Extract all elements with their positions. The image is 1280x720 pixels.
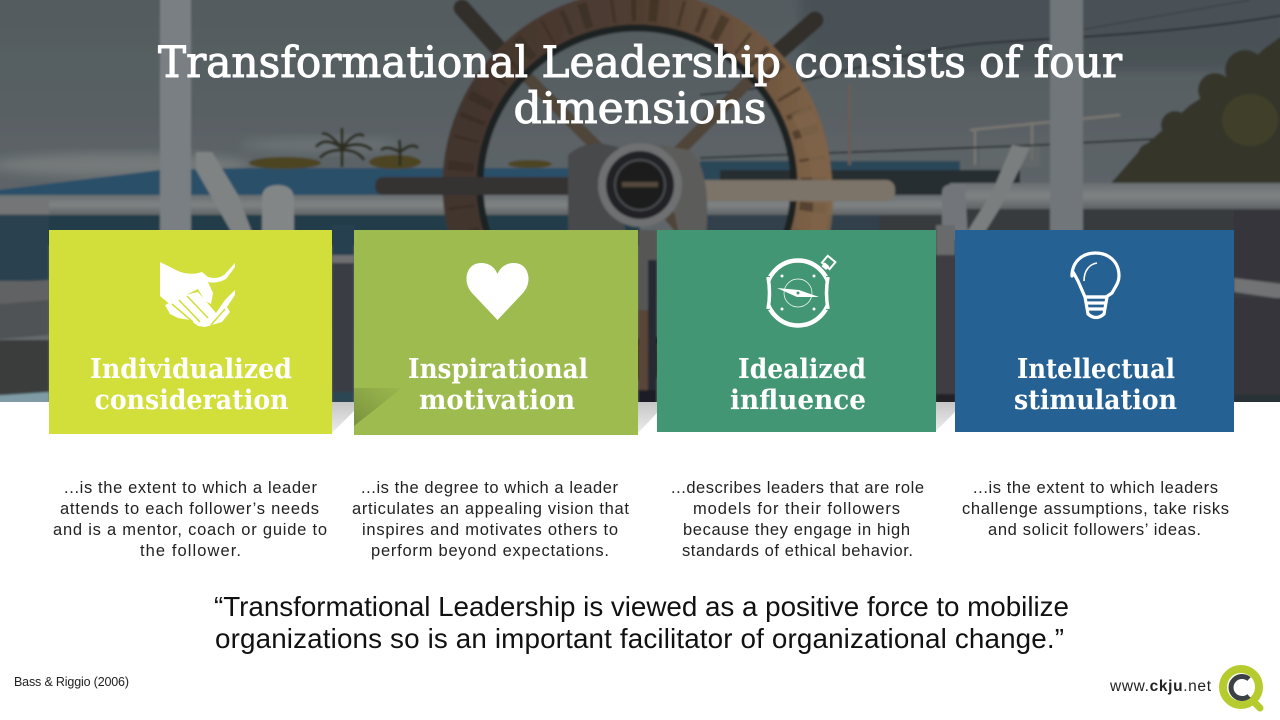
title <box>158 38 1122 134</box>
heading: idealized influence: Idealized <box>738 354 866 385</box>
text block: individualized consideration description <box>53 479 327 560</box>
heading: individualized consideration <box>90 354 292 416</box>
text block: intellectual stimulation description: and solicit followers’ ideas. <box>988 521 1201 539</box>
panel: individualized consideration <box>49 230 332 434</box>
text block: inspirational motivation description: perform beyond expectations. <box>371 542 609 560</box>
deck strips <box>0 202 48 214</box>
heading: idealized influence: influence <box>730 385 866 416</box>
icon: heart <box>466 263 529 320</box>
text block: individualized consideration description: the follower. <box>140 542 241 560</box>
title: Transformational Leadership consists of four <box>158 38 1122 88</box>
text block: inspirational motivation description: inspires and motivates others to <box>362 521 618 539</box>
website url: www.ckju.net <box>1109 678 1212 695</box>
text block: individualized consideration description: attends to each follower’s needs <box>60 500 319 518</box>
text block: individualized consideration description: ...is the extent to which a leader <box>64 479 318 497</box>
citation: Bass & Riggio (2006) <box>14 675 129 689</box>
heading: inspirational motivation <box>408 354 588 416</box>
heading: intellectual stimulation: Intellectual <box>1017 354 1175 385</box>
background photo: ship wheel on deck <box>0 0 1280 415</box>
icon: compass <box>762 256 835 326</box>
panel: inspirational motivation <box>354 230 638 435</box>
panel: idealized influence <box>657 230 936 432</box>
heading: individualized consideration: consideration <box>94 385 289 416</box>
title: dimensions <box>514 84 766 134</box>
text block: idealized influence description <box>671 479 924 560</box>
wheel <box>375 8 895 362</box>
text block: inspirational motivation description: ...is the degree to which a leader <box>361 479 618 497</box>
text block: idealized influence description: ...describes leaders that are role <box>671 479 924 497</box>
palms and trees <box>249 155 552 169</box>
text block: intellectual stimulation description: ...is the extent to which leaders <box>973 479 1218 497</box>
icon: logo <box>1223 669 1260 708</box>
text block: idealized influence description: models for their followers <box>693 500 900 518</box>
wires <box>700 0 1280 158</box>
quote: “Transformational Leadership is viewed as a positive force to mobilize <box>214 591 1069 622</box>
distant building <box>970 115 1120 165</box>
text block: idealized influence description: because they engage in high <box>683 521 910 539</box>
heading: intellectual stimulation: stimulation <box>1014 385 1177 416</box>
heading: intellectual stimulation <box>1014 354 1177 416</box>
heading: inspirational motivation: Inspirational <box>408 354 588 385</box>
poles <box>160 0 191 240</box>
text block: intellectual stimulation description: challenge assumptions, take risks <box>962 500 1229 518</box>
heading: idealized influence <box>730 354 866 416</box>
railing <box>0 195 960 215</box>
text block: inspirational motivation description <box>352 479 629 560</box>
text block: intellectual stimulation description <box>962 479 1229 539</box>
quote: organizations so is an important facilitator of organizational change.” <box>215 623 1064 654</box>
heading: individualized consideration: Individualized <box>90 354 292 385</box>
shadows under cards <box>332 402 955 433</box>
heading: inspirational motivation: motivation <box>419 385 575 416</box>
text block: inspirational motivation description: articulates an appealing vision that <box>352 500 629 518</box>
panel: intellectual stimulation <box>955 230 1234 432</box>
text block: individualized consideration description: and is a mentor, coach or guide to <box>53 521 327 539</box>
text block: idealized influence description: standards of ethical behavior. <box>682 542 913 560</box>
icon: light bulb <box>1072 253 1119 318</box>
icon: handshake <box>160 262 235 327</box>
quote <box>214 591 1069 654</box>
